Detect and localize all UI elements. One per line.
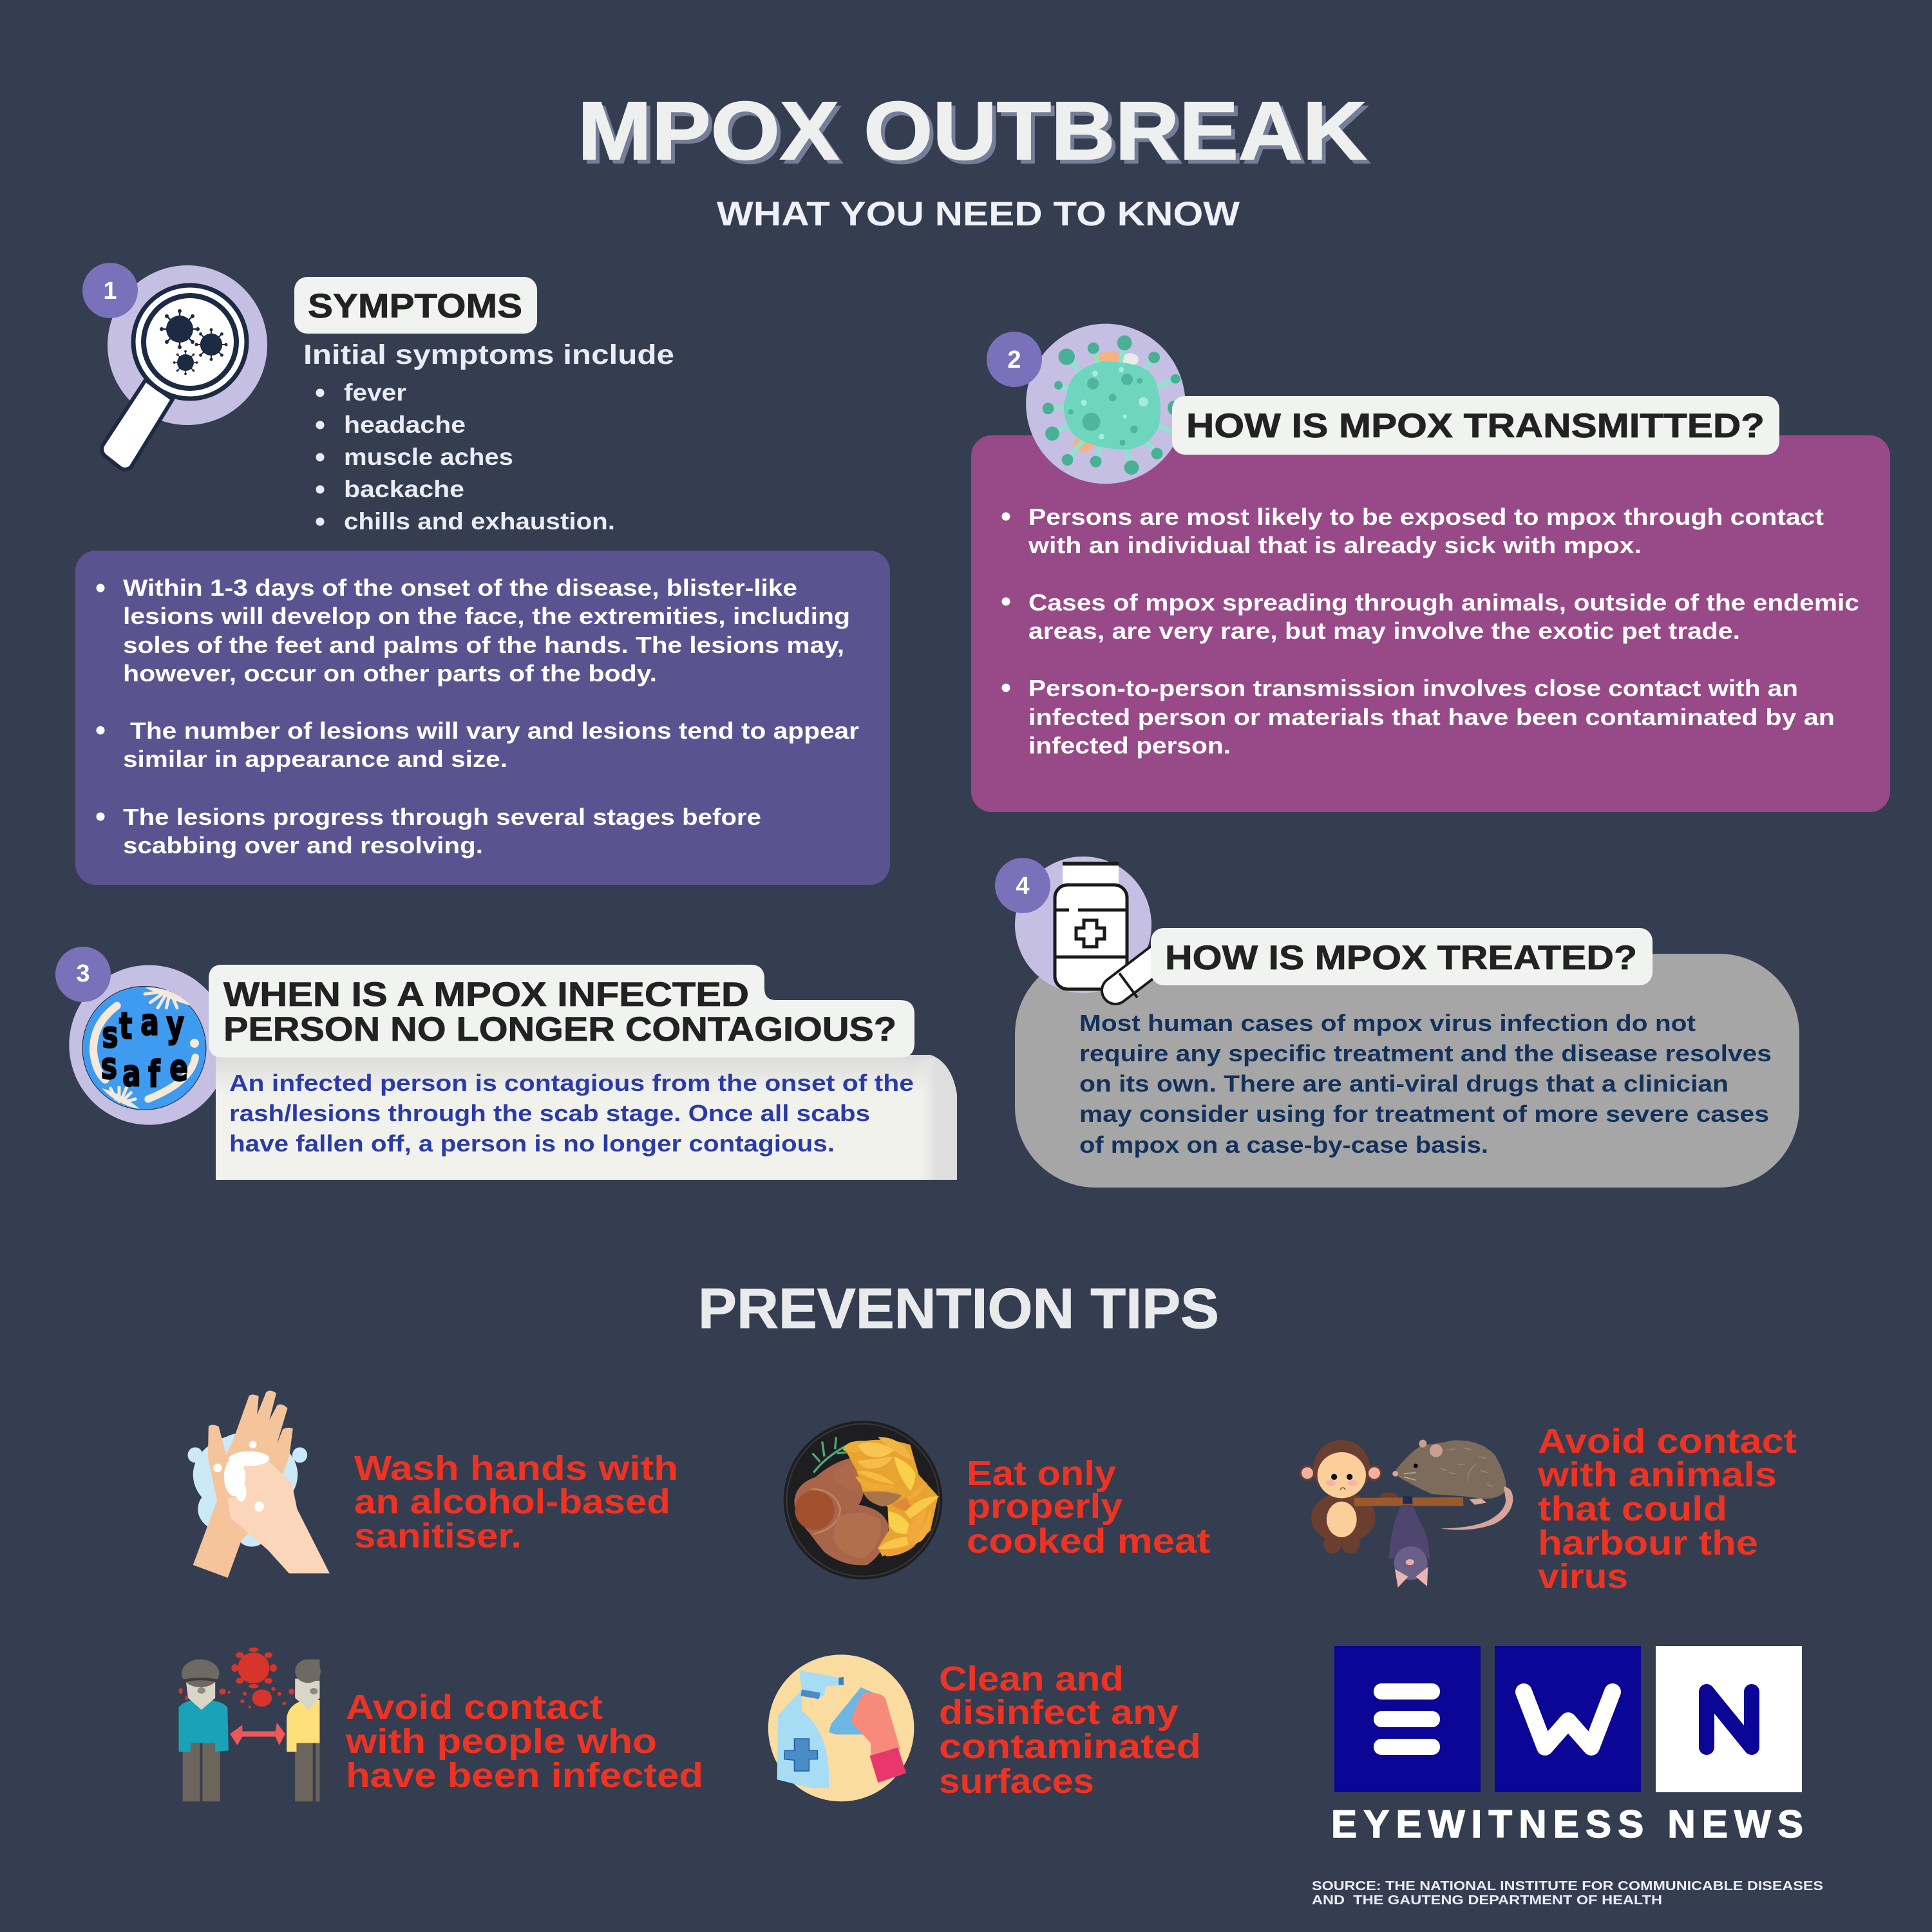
panel: lesions details: however, occur on other parts of the body. [123, 660, 657, 687]
heading: symptoms [294, 277, 537, 334]
text: wash hands: an alcohol-based [354, 1482, 670, 1521]
badge: number 2 [987, 332, 1042, 387]
panel: lesions details: lesions will develop on the face, the extremities, including [123, 603, 850, 629]
tip: avoid infected people [179, 1647, 703, 1801]
text: transmission bullets: Cases of mpox spreading through animals, outside of the endemic [1028, 589, 1859, 616]
text: treatment: on its own. There are anti-viral drugs that a clinician [1079, 1070, 1728, 1097]
icon: stay safe badge: stay [102, 1001, 184, 1056]
text: treatment: may consider using for treatment of more severe cases [1079, 1101, 1769, 1127]
icon: plate of meat and potatoes [784, 1421, 942, 1580]
source note: AND THE GAUTENG DEPARTMENT OF HEALTH [1312, 1893, 1662, 1908]
tip: clean surfaces [768, 1654, 1201, 1801]
title: MPOX OUTBREAK [578, 85, 1367, 177]
text: contagious period [229, 1070, 914, 1157]
logo wordmark: EYEWITNESS NEWS [1331, 1803, 1803, 1846]
subtitle: WHAT YOU NEED TO KNOW [717, 195, 1240, 233]
text: transmission bullets: infected person. [1028, 732, 1231, 759]
icon: stay safe badge: safe [101, 1045, 188, 1095]
logo block: N [1656, 1646, 1802, 1792]
icon: spray bottle and cleaning hand [768, 1654, 914, 1801]
panel: lesions details: similar in appearance and size. [123, 746, 507, 772]
icon: stay safe badge [69, 965, 229, 1125]
badge: number 4 [995, 858, 1050, 913]
text: transmission bullets [1002, 504, 1859, 759]
text: transmission bullets: with an individual that is already sick with mpox. [1028, 532, 1642, 558]
panel: lesions details: scabbing over and resolving. [123, 832, 483, 858]
icon: monkey, rat and bat on a branch [1300, 1440, 1513, 1587]
panel: treatment [995, 857, 1799, 1188]
list: initial symptoms [316, 379, 615, 535]
panel: lesions details: The number of lesions will vary and lesions tend to appear [130, 717, 859, 744]
panel background: grey [1015, 954, 1799, 1188]
heading: when no longer contagious: PERSON NO LONGER CONTAGIOUS? [223, 1010, 896, 1048]
badge: number 1: 1 [103, 278, 117, 305]
list: initial symptoms: fever [344, 379, 406, 406]
text: clean surfaces: Clean and [939, 1660, 1124, 1698]
text: transmission bullets: Persons are most likely to be exposed to mpox through contact [1028, 504, 1824, 530]
text: cooked meat [967, 1454, 1210, 1560]
text: treatment: require any specific treatment and the disease resolves [1079, 1040, 1772, 1066]
panel background: magenta [971, 435, 1890, 812]
text: avoid animals: virus [1538, 1557, 1628, 1596]
panel: lesions details: The lesions progress through several stages before [123, 804, 761, 830]
heading: how is mpox treated: HOW IS MPOX TREATED? [1165, 939, 1637, 977]
text: avoid animals [1537, 1422, 1797, 1596]
list: initial symptoms: backache [344, 476, 464, 502]
source note [1312, 1879, 1823, 1908]
text: avoid infected people: Avoid contact [346, 1688, 603, 1727]
text: clean surfaces: disinfect any [939, 1693, 1179, 1732]
heading: when no longer contagious: WHEN IS A MPOX INFECTED [223, 976, 749, 1014]
heading: how is mpox treated [1151, 928, 1653, 985]
panel: symptoms [75, 263, 890, 885]
icon: magnifying glass with viruses [102, 265, 267, 469]
panel: transmission [971, 324, 1890, 812]
text: clean surfaces: contaminated [939, 1727, 1201, 1766]
icon: medicine bottle and pill [1015, 857, 1159, 998]
panel: lesions details: soles of the feet and palms of the hands. The lesions may, [123, 632, 844, 658]
text: wash hands: Wash hands with [354, 1449, 678, 1488]
text: avoid animals: harbour the [1538, 1524, 1758, 1562]
heading: how is mpox transmitted [1172, 396, 1779, 455]
panel background: cream [216, 1055, 957, 1180]
tip: cooked meat [784, 1421, 1210, 1580]
text: treatment: of mpox on a case-by-case basis. [1079, 1132, 1488, 1158]
badge: number 2: 2 [1007, 346, 1021, 374]
text: transmission bullets: areas, are very rare, but may involve the exotic pet trade. [1028, 618, 1740, 644]
text: wash hands [354, 1449, 678, 1555]
panel: lesions details [75, 551, 890, 885]
text: cooked meat: cooked meat [967, 1522, 1210, 1560]
text: avoid animals: with animals [1537, 1455, 1777, 1494]
text: clean surfaces [939, 1660, 1201, 1801]
text: avoid infected people [345, 1688, 703, 1795]
logo block: E [1334, 1646, 1481, 1792]
panel: lesions details: Within 1-3 days of the onset of the disease, blister-like [123, 574, 797, 601]
text: wash hands: sanitiser. [354, 1517, 522, 1555]
logo: eyewitness news [1331, 1646, 1803, 1846]
list: initial symptoms: chills and exhaustion. [344, 508, 615, 535]
title: MPOX OUTBREAK [582, 89, 1370, 181]
tip: avoid animals [1300, 1422, 1797, 1596]
source note: SOURCE: THE NATIONAL INSTITUTE FOR COMMUNICABLE DISEASES [1312, 1879, 1823, 1893]
tip: wash hands [187, 1391, 678, 1578]
heading: symptoms: SYMPTOMS [308, 287, 522, 325]
heading: when no longer contagious [209, 965, 914, 1057]
icon: two people with virus and distance arrow [179, 1647, 321, 1801]
heading: prevention tips: PREVENTION TIPS [698, 1276, 1219, 1340]
logo block: W [1495, 1646, 1641, 1792]
text: transmission bullets: infected person or materials that have been contaminated by an [1028, 704, 1835, 730]
text: contagious period: have fallen off, a person is no longer contagious. [229, 1130, 835, 1157]
text: transmission bullets: Person-to-person transmission involves close contact with an [1028, 675, 1798, 701]
list: initial symptoms: muscle aches [344, 444, 513, 470]
icon: green virus [1026, 324, 1186, 484]
badge: number 4: 4 [1016, 873, 1030, 900]
badge: number 3 [55, 947, 111, 1002]
badge: number 3: 3 [76, 960, 90, 987]
text: contagious period: An infected person is contagious from the onset of the [229, 1070, 914, 1096]
text: contagious period: rash/lesions through the scab stage. Once all scabs [229, 1100, 870, 1126]
heading: how is mpox transmitted: HOW IS MPOX TRANSMITTED? [1186, 407, 1765, 445]
text: clean surfaces: surfaces [939, 1762, 1094, 1801]
text: avoid animals: that could [1538, 1490, 1727, 1528]
text: cooked meat: Eat only [967, 1454, 1116, 1493]
text: avoid infected people: with people who [345, 1722, 657, 1761]
text: initial symptoms intro: Initial symptoms include [303, 339, 674, 370]
badge: number 1 [82, 263, 138, 318]
text: avoid animals: Avoid contact [1538, 1422, 1797, 1461]
icon: washing hands [187, 1391, 330, 1578]
text: avoid infected people: have been infected [346, 1756, 703, 1795]
panel: no longer contagious [55, 947, 957, 1180]
text: treatment [1079, 1010, 1772, 1158]
text: cooked meat: properly [967, 1487, 1122, 1526]
list: initial symptoms: headache [344, 412, 466, 438]
text: treatment: Most human cases of mpox virus infection do not [1079, 1010, 1696, 1036]
